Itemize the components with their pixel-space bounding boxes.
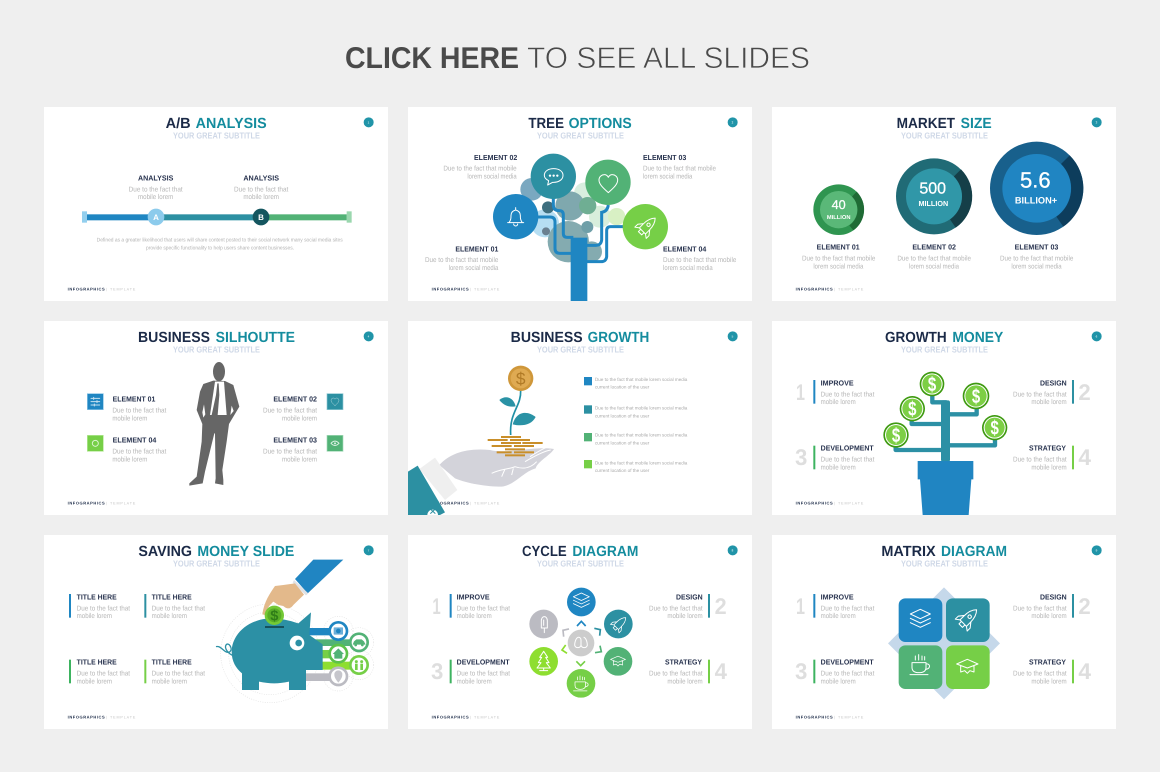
hand with coin: $ [270,608,278,624]
title: MATRIX [881,543,936,559]
footer: INFOGRAPHICS [796,287,833,291]
tree trunk and branches [537,197,624,301]
title [881,543,1007,559]
item 1: improve: IMPROVE [821,379,854,387]
panel: market size [772,107,1116,301]
item 4: strategy: Due to the fact that [1013,670,1067,677]
footer: | TEMPLATE [106,715,135,719]
item 2: design [649,593,727,620]
item 1: improve [432,593,510,620]
money tree coins [883,372,1007,448]
label: element 03: Due to the fact that mobile [643,165,716,172]
label: element 02: ELEMENT 02 [474,153,517,162]
label: element 02 [897,243,971,270]
option circle: heart [585,160,631,205]
option circle: bell [493,194,538,239]
item 1: improve: Due to the fact that [821,390,874,398]
item 1: improve: IMPROVE [821,593,854,601]
list item 1: current location of the user [595,384,649,390]
label: element 01: ELEMENT 01 [817,243,860,251]
footer [796,287,863,291]
plant with dollar coin: $ [516,369,526,388]
icon: family [349,655,369,675]
label: element 01: ELEMENT 01 [113,395,155,403]
label: element 04: lorem social media [663,264,713,272]
label: element 02: Due to the fact that mobile [443,165,517,172]
label: element 01: mobile lorem [112,414,147,422]
cycle node: layers [567,588,596,616]
money tree branches [896,395,995,462]
title: A/B [166,115,191,131]
panel: business silhouette [44,321,388,515]
title: ANALYSIS [196,115,267,131]
cycle node: popsicle [529,610,558,638]
page badge [364,545,374,555]
footer: INFOGRAPHICS [432,715,469,719]
item: title here 1: TITLE HERE [77,593,117,601]
footer: | TEMPLATE [470,287,499,291]
donut: 40 million: 40 [832,198,846,212]
label: element 04: ELEMENT 04 [663,245,707,253]
item 3: development: DEVELOPMENT [821,444,874,452]
label: element 01: lorem social media [449,264,498,272]
label: element 02 [263,395,317,422]
footer [68,715,135,719]
item: title here 1: mobile lorem [77,612,112,620]
label: element 03 [263,436,317,463]
matrix tile: rocket [946,598,990,642]
icon: map pin [328,666,348,686]
item 4: strategy: STRATEGY [665,658,702,666]
list item 1 [584,377,687,390]
item 3: development: DEVELOPMENT [457,658,510,666]
label: element 02: Due to the fact that mobile [897,254,971,262]
footer [432,501,499,505]
title: GROWTH [588,329,649,345]
item 2: design [1013,593,1091,620]
hand with coin [262,560,343,625]
list item 3 [584,432,687,445]
item 2: design: Due to the fact that [649,604,703,612]
item 2: design: mobile lorem [1031,612,1067,620]
title: DIAGRAM [572,543,638,559]
item 2: design: 2 [715,594,727,619]
flower pot [918,461,973,515]
page badge [364,331,374,341]
item: title here 2 [144,593,205,620]
label: element 02: ELEMENT 02 [273,395,317,403]
label: element 01: ELEMENT 01 [455,245,498,253]
item: title here 3 [69,658,130,685]
money tree coins: $ [892,424,900,446]
cycle node: graduation cap [604,647,632,676]
item 4: strategy: Due to the fact that [649,670,703,677]
paragraph [97,237,343,251]
title: MONEY SLIDE [197,543,294,559]
list item 1: Due to the fact that mobile lorem social media [595,377,687,382]
item 1: improve: 1 [432,594,441,619]
item 4: strategy: mobile lorem [1031,463,1067,471]
item 4: strategy [1013,444,1091,471]
label: element 02: Due to the fact that [263,406,317,414]
donut: 5.6 billion: BILLION+ [1015,195,1057,206]
item 3: development [431,658,510,685]
item 2: design: 2 [1078,380,1091,405]
page badge [1092,331,1102,341]
footer [796,501,863,505]
title [522,543,638,559]
label: element 03: Due to the fact that mobile [1000,254,1073,262]
tree canopy blobs [520,178,625,262]
donut: 500 million: MILLION [918,199,948,208]
cycle node: rocket [604,610,633,638]
item: title here 2: mobile lorem [152,612,187,620]
title [138,329,295,345]
label: element 03: lorem social media [643,173,692,180]
title [511,329,649,345]
item: title here 3: mobile lorem [77,677,112,685]
item 3: development: Due to the fact that [821,456,874,463]
title: CYCLE [522,543,567,559]
panel: saving money [44,535,388,729]
label: element 01 [802,243,875,270]
donut: 40 million: MILLION [827,214,850,220]
title [885,329,1003,345]
subtitle: YOUR GREAT SUBTITLE [901,344,988,354]
page badge: 6 [1096,335,1097,338]
label: element 01: Due to the fact that [112,406,166,414]
list item 4: current location of the user [595,468,649,473]
side icon bars [305,628,350,681]
item 3: development: DEVELOPMENT [821,658,874,666]
item 1: improve: Due to the fact that [457,604,510,612]
footer: | TEMPLATE [470,501,499,505]
label: element 03: ELEMENT 03 [643,153,686,162]
item 2: design: 2 [1078,594,1091,619]
matrix tile: layers [899,598,942,642]
item 2: design: mobile lorem [667,612,703,620]
item 4: strategy: 4 [1078,659,1091,684]
footer: | TEMPLATE [106,287,135,291]
item 3: development: 3 [431,659,443,684]
A/B timeline bar [82,209,352,225]
label: element 01: Due to the fact that mobile [425,256,498,264]
backing diamond [888,587,1000,699]
title: GROWTH [885,329,947,345]
item: title here 4: TITLE HERE [152,658,192,666]
item 3: development [795,658,874,685]
item 3: development [795,444,874,471]
subtitle: YOUR GREAT SUBTITLE [901,130,988,140]
subtitle: YOUR GREAT SUBTITLE [537,130,624,140]
matrix tile: cup [899,645,942,689]
money tree coins: $ [908,398,916,420]
title [138,543,294,559]
column: analysis B: ANALYSIS [243,174,279,182]
money tree coins: $ [990,417,999,439]
icon tile: sliders [87,394,103,410]
item 3: development: 3 [795,659,807,684]
plant with dollar coin [499,366,536,435]
subtitle: YOUR GREAT SUBTITLE [901,558,988,568]
label: element 04 [663,245,736,272]
donut: 500 million [896,158,972,234]
title: MARKET [897,115,955,131]
footer [796,715,863,719]
item: title here 1: Due to the fact that [77,604,130,612]
label: element 03: ELEMENT 03 [1015,243,1058,251]
title: SAVING [138,543,192,559]
piggy bank [216,612,323,690]
money tree coins: $ [928,373,936,395]
label: element 03: mobile lorem [282,456,317,463]
item 4: strategy: 4 [715,659,727,684]
money tree coins: $ [972,385,980,407]
label: element 02: lorem social media [909,262,959,270]
matrix tile: graduation cap [946,645,990,689]
title [166,115,267,131]
footer: | TEMPLATE [834,501,863,505]
subtitle: YOUR GREAT SUBTITLE [537,344,624,354]
label: element 04: ELEMENT 04 [113,436,157,444]
item 1: improve [796,593,874,620]
icon: house [328,644,348,664]
icon: camera [328,621,348,641]
icon tile: heart [327,394,343,410]
list item 3: Due to the fact that mobile lorem social media [595,432,687,438]
list item 4 [584,460,687,473]
column: analysis B [234,174,288,201]
column: analysis A: ANALYSIS [138,174,173,182]
panel: tree options [408,107,752,301]
item 3: development: Due to the fact that [457,670,510,677]
footer: INFOGRAPHICS [432,501,469,505]
item 1: improve: Due to the fact that [821,604,874,612]
item 3: development: mobile lorem [821,463,856,471]
item 4: strategy: Due to the fact that [1013,456,1067,463]
paragraph: provide specific functionality to help users share content businesses. [146,245,294,251]
footer: | TEMPLATE [834,287,863,291]
title: TREE [528,115,564,131]
footer [432,287,499,291]
main heading [345,42,810,75]
A/B timeline bar: A [153,213,159,222]
page badge [1092,117,1102,127]
cycle centre: binoculars [568,630,594,656]
label: element 03: ELEMENT 03 [273,436,317,444]
item: title here 1 [69,593,130,620]
option circle: chat [531,154,576,199]
label: element 04: Due to the fact that [112,448,166,455]
page badge: 1 [368,121,369,124]
cycle node: tree [529,647,558,676]
subtitle: YOUR GREAT SUBTITLE [173,344,260,354]
footer: INFOGRAPHICS [432,287,469,291]
item: title here 4 [144,658,205,685]
item 1: improve: mobile lorem [457,612,492,620]
item 4: strategy: 4 [1078,445,1091,470]
label: element 02: lorem social media [467,173,517,180]
list item 2 [584,405,687,418]
panel: matrix diagram [772,535,1116,729]
panel: cycle diagram [408,535,752,729]
main heading: CLICK HERE [345,42,519,75]
item 2: design: DESIGN [1040,593,1067,601]
item: title here 4: mobile lorem [152,677,187,685]
paragraph: Defined as a greater likelihood that users will share content posted to their social network many social media sites [97,237,343,243]
donut: 5.6 billion [990,142,1083,235]
footer: | TEMPLATE [470,715,499,719]
page badge: 3 [1096,121,1097,124]
title: BUSINESS [138,329,210,345]
footer: INFOGRAPHICS [68,715,105,719]
label: element 01: Due to the fact that mobile [802,254,875,262]
column: analysis A: Due to the fact that [129,185,183,193]
item 3: development: Due to the fact that [821,670,874,677]
footer [432,715,499,719]
column: analysis A: mobile lorem [138,193,173,201]
item 4: strategy: STRATEGY [1029,658,1066,666]
item 2: design: Due to the fact that [1013,390,1067,398]
page badge [728,545,738,555]
item 2: design: DESIGN [1040,379,1067,387]
label: element 04: Due to the fact that mobile [663,256,736,264]
cycle chevrons [562,621,601,666]
label: element 02: mobile lorem [282,414,317,422]
footer: INFOGRAPHICS [796,501,833,505]
label: element 01 [425,245,498,272]
item 4: strategy: mobile lorem [1031,677,1067,685]
page badge: 2 [732,121,733,124]
item: title here 3: Due to the fact that [77,670,130,677]
title: DIAGRAM [941,543,1007,559]
page badge: 4 [368,335,369,338]
page badge [364,117,374,127]
item 1: improve [796,379,874,406]
dotted background rings [221,604,374,703]
title: BUSINESS [511,329,583,345]
item 2: design [1013,379,1091,406]
list item 3: current location of the user [595,440,649,445]
label: element 02 [443,153,517,180]
label: element 04 [112,436,166,463]
item 1: improve: 1 [796,594,805,619]
cycle node: cup [567,669,595,698]
column: analysis B: Due to the fact that [234,185,288,193]
page badge: 8 [732,549,733,552]
item 2: design: Due to the fact that [1013,604,1067,612]
item 4: strategy: STRATEGY [1029,444,1066,452]
donut: 5.6 billion: 5.6 [1020,167,1051,192]
businessman silhouette [189,362,239,486]
option circle: rocket [623,204,668,249]
footer [68,287,135,291]
footer: INFOGRAPHICS [68,287,105,291]
item 4: strategy: mobile lorem [667,677,703,685]
hand [408,446,554,515]
list item 2: Due to the fact that mobile lorem social media [595,405,687,411]
subtitle: YOUR GREAT SUBTITLE [537,558,624,568]
item: title here 3: TITLE HERE [77,658,117,666]
label: element 01 [112,395,166,422]
title: SIZE [961,115,992,131]
page badge: 5 [732,335,733,338]
page badge [1092,545,1102,555]
page badge: 9 [1096,549,1097,552]
list item 4: Due to the fact that mobile lorem social media [595,460,687,465]
title: OPTIONS [569,115,632,131]
item 3: development: mobile lorem [821,677,856,685]
panel: A/B analysis [44,107,388,301]
item: title here 2: Due to the fact that [152,604,205,612]
item 1: improve: IMPROVE [457,593,490,601]
item 1: improve: mobile lorem [821,398,856,406]
title: SILHOUTTE [216,329,295,345]
footer: | TEMPLATE [834,715,863,719]
main heading: TO SEE ALL SLIDES [527,42,810,75]
donut: 40 million [813,184,864,235]
item 4: strategy [1013,658,1091,685]
donut: 500 million: 500 [919,180,946,197]
subtitle: YOUR GREAT SUBTITLE [173,130,260,140]
coin stack bricks [488,436,543,456]
item 3: development: mobile lorem [457,677,492,685]
title: MONEY [952,329,1003,345]
page badge [728,117,738,127]
panel: growth money [772,321,1116,515]
icon tile: gear [87,435,103,451]
A/B timeline bar: B [258,213,264,222]
label: element 04: mobile lorem [112,456,147,463]
label: element 03: lorem social media [1011,262,1062,270]
icon: car [349,632,369,652]
subtitle: YOUR GREAT SUBTITLE [173,558,260,568]
item 4: strategy [649,658,727,685]
label: element 03 [643,153,716,180]
item 1: improve: mobile lorem [821,612,856,620]
title [528,115,632,131]
footer [68,501,135,505]
label: element 03 [1000,243,1073,270]
label: element 03: Due to the fact that [263,448,317,455]
title [897,115,992,131]
list item 2: current location of the user [595,413,649,418]
footer: INFOGRAPHICS [68,501,105,505]
item: title here 2: TITLE HERE [152,593,192,601]
footer: | TEMPLATE [106,501,135,505]
footer: INFOGRAPHICS [796,715,833,719]
label: element 02: ELEMENT 02 [912,243,956,251]
column: analysis A [129,174,183,201]
item: title here 4: Due to the fact that [152,670,205,677]
icon tile: eye [327,435,343,451]
label: element 01: lorem social media [813,262,863,270]
item 3: development: 3 [795,445,807,470]
page badge: 7 [368,549,369,552]
item 2: design: mobile lorem [1031,398,1067,406]
panel: business growth [408,321,752,515]
item 1: improve: 1 [796,380,805,405]
item 2: design: DESIGN [676,593,703,601]
page badge [728,331,738,341]
column: analysis B: mobile lorem [243,193,279,201]
